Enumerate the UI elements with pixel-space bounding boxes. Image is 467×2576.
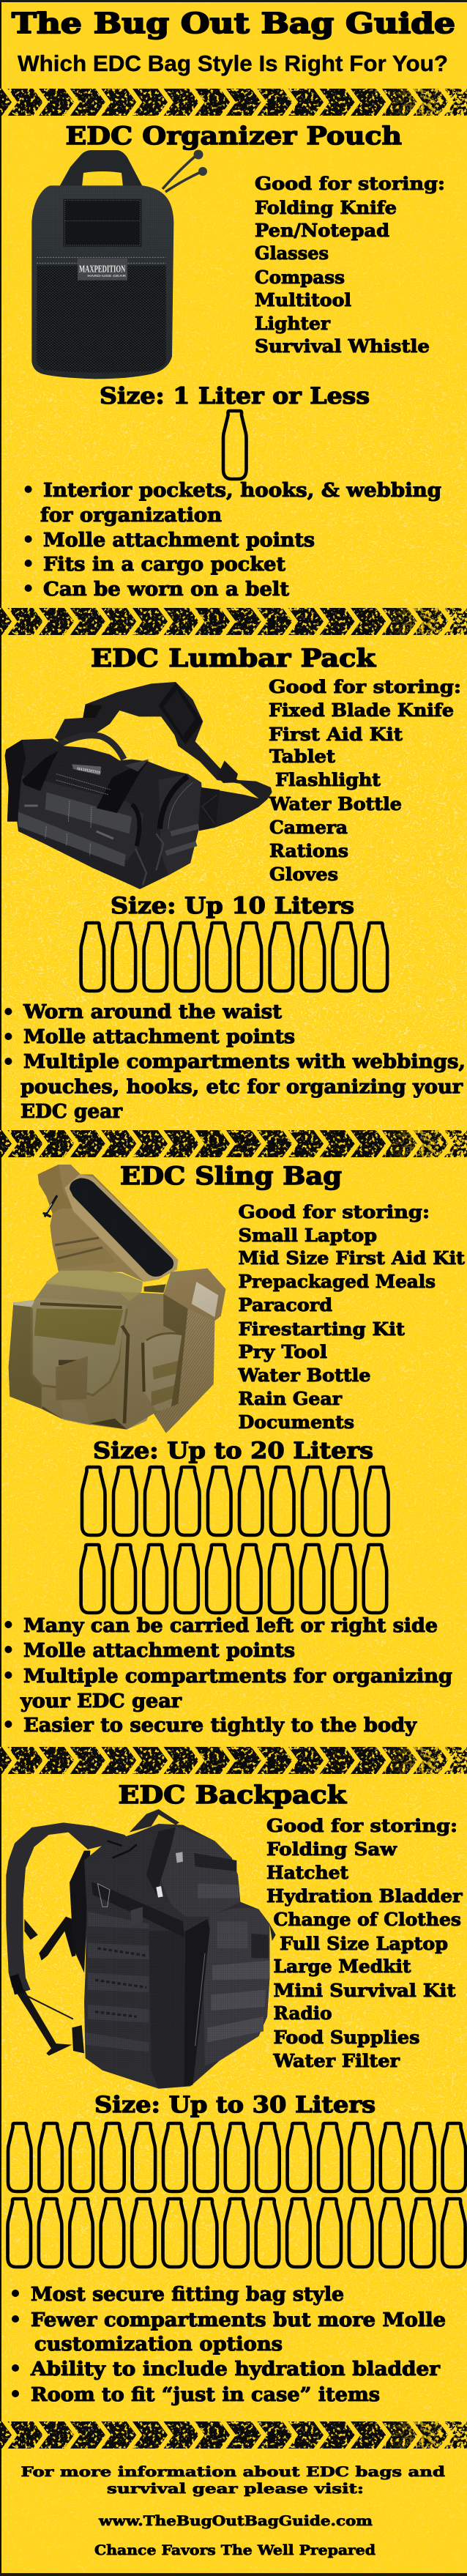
feature bullets: lumbar pack: pouches, hooks, etc for organizing your bbox=[20, 1077, 463, 1099]
storage list: organizer pouch: Pen/Notepad bbox=[255, 220, 389, 241]
storage list: sling bag: Firestarting Kit bbox=[239, 1318, 405, 1340]
storage list: organizer pouch: Folding Knife bbox=[255, 197, 397, 218]
icon rows: twenty bottles bbox=[81, 1467, 388, 1613]
feature bullets: backpack: Fewer compartments but more Molle bbox=[31, 2309, 446, 2331]
storage list: lumbar pack: First Aid Kit bbox=[269, 724, 403, 745]
chevron divider bbox=[0, 2420, 467, 2450]
storage list: backpack: Water Filter bbox=[272, 2050, 400, 2071]
feature bullets: sling bag: your EDC gear bbox=[20, 1690, 182, 1712]
heading: organizer pouch: EDC Organizer Pouch bbox=[66, 122, 402, 151]
storage list: backpack: Folding Saw bbox=[266, 1838, 397, 1860]
size label: 10 liters: Size: Up 10 Liters bbox=[111, 893, 354, 919]
feature bullets: organizer pouch: for organization bbox=[40, 505, 222, 527]
feature bullets: lumbar pack: Multiple compartments with webbings, bbox=[23, 1051, 466, 1073]
photo: organizer pouch bbox=[31, 149, 207, 379]
heading: lumbar pack: EDC Lumbar Pack bbox=[91, 644, 377, 673]
chevron divider bbox=[0, 1129, 467, 1159]
storage list: organizer pouch: Multitool bbox=[255, 289, 351, 311]
feature bullets: organizer pouch: Molle attachment points bbox=[43, 530, 315, 552]
size label: 30 liters: Size: Up to 30 Liters bbox=[94, 2092, 376, 2118]
storage list: lumbar pack: Fixed Blade Knife bbox=[269, 699, 454, 721]
feature bullets: lumbar pack: Worn around the waist bbox=[23, 1001, 282, 1023]
icon rows: thirty bottles bbox=[7, 2123, 466, 2267]
storage list: sling bag: Small Laptop bbox=[239, 1225, 377, 1246]
feature bullets: organizer pouch: Interior pockets, hooks, & webbing bbox=[43, 480, 441, 502]
storage list: organizer pouch: Good for storing: bbox=[255, 173, 445, 194]
subtitle: Which EDC Bag Style Is Right For You? bbox=[18, 51, 448, 76]
feature bullets: sling bag: Easier to secure tightly to the body bbox=[23, 1715, 417, 1737]
storage list: backpack bbox=[266, 1815, 463, 2071]
storage list: backpack: Food Supplies bbox=[274, 2027, 420, 2048]
heading: sling bag: EDC Sling Bag bbox=[120, 1162, 342, 1191]
photo: organizer pouch: MAXPEDITION bbox=[79, 263, 126, 274]
storage list: sling bag bbox=[237, 1201, 465, 1433]
storage list: sling bag: Prepackaged Meals bbox=[239, 1271, 436, 1292]
storage list: lumbar pack bbox=[269, 676, 461, 885]
feature bullets: sling bag bbox=[4, 1615, 452, 1737]
storage list: lumbar pack: Good for storing: bbox=[269, 676, 461, 697]
photo: organizer pouch: HARD-USE GEAR bbox=[87, 274, 127, 278]
feature bullets: backpack: Ability to include hydration bladder bbox=[30, 2358, 440, 2380]
chevron divider bbox=[0, 606, 467, 636]
heading: backpack: EDC Backpack bbox=[119, 1781, 348, 1810]
title: The Bug Out Bag Guide bbox=[12, 7, 455, 40]
feature bullets: organizer pouch: Fits in a cargo pocket bbox=[43, 554, 285, 576]
panel: EDC Lumbar Pack bbox=[4, 644, 466, 1123]
icon: one bottle bbox=[223, 411, 246, 479]
storage list: organizer pouch: Compass bbox=[255, 267, 345, 288]
photo: lumbar pack bbox=[5, 682, 272, 889]
icon row: ten bottles bbox=[81, 923, 387, 991]
feature bullets: backpack: Room to fit “just in case” items bbox=[31, 2384, 380, 2406]
storage list: sling bag: Rain Gear bbox=[239, 1388, 342, 1409]
feature bullets: sling bag: Molle attachment points bbox=[23, 1640, 295, 1662]
footer text bbox=[20, 2464, 445, 2558]
chevron divider bbox=[0, 87, 467, 117]
size label: 1 liter: Size: 1 Liter or Less bbox=[100, 383, 370, 409]
footer text: survival gear please visit: bbox=[107, 2481, 364, 2497]
storage list: organizer pouch bbox=[255, 173, 445, 357]
storage list: sling bag: Mid Size First Aid Kit bbox=[239, 1247, 465, 1269]
feature bullets: backpack bbox=[12, 2284, 446, 2406]
panel: EDC Organizer Pouch bbox=[25, 122, 445, 601]
storage list: lumbar pack: Water Bottle bbox=[269, 793, 402, 814]
storage list: backpack: Radio bbox=[274, 2002, 332, 2024]
chevron divider bbox=[0, 1745, 467, 1775]
storage list: lumbar pack: Camera bbox=[269, 817, 348, 838]
feature bullets: lumbar pack: Molle attachment points bbox=[23, 1026, 295, 1048]
feature bullets: sling bag: Many can be carried left or right side bbox=[23, 1615, 438, 1637]
storage list: backpack: Large Medkit bbox=[274, 1956, 411, 1977]
panel: EDC Sling Bag bbox=[4, 1162, 465, 1737]
photo: backpack bbox=[6, 1809, 276, 2089]
storage list: sling bag: Water Bottle bbox=[237, 1365, 370, 1386]
storage list: sling bag: Good for storing: bbox=[239, 1201, 430, 1222]
storage list: organizer pouch: Survival Whistle bbox=[255, 335, 430, 357]
storage list: backpack: Full Size Laptop bbox=[280, 1933, 448, 1954]
footer text: www.TheBugOutBagGuide.com bbox=[98, 2513, 373, 2529]
storage list: organizer pouch: Glasses bbox=[255, 242, 329, 264]
feature bullets: organizer pouch: Can be worn on a belt bbox=[43, 579, 289, 601]
storage list: organizer pouch: Lighter bbox=[255, 313, 330, 334]
storage list: backpack: Hatchet bbox=[266, 1862, 348, 1883]
storage list: lumbar pack: Flashlight bbox=[275, 769, 381, 790]
panel: EDC Backpack bbox=[6, 1781, 466, 2406]
photo: sling bag bbox=[9, 1165, 225, 1433]
feature bullets: organizer pouch bbox=[25, 480, 441, 601]
feature bullets: backpack: Most secure fitting bag style bbox=[31, 2284, 344, 2306]
storage list: backpack: Hydration Bladder bbox=[266, 1885, 463, 1907]
feature bullets: sling bag: Multiple compartments for organizing bbox=[23, 1666, 452, 1688]
storage list: backpack: Good for storing: bbox=[266, 1815, 457, 1836]
feature bullets: lumbar pack bbox=[4, 1001, 466, 1123]
storage list: backpack: Mini Survival Kit bbox=[274, 1980, 455, 2001]
storage list: lumbar pack: Rations bbox=[269, 840, 348, 861]
storage list: sling bag: Paracord bbox=[239, 1294, 332, 1315]
feature bullets: lumbar pack: EDC gear bbox=[20, 1101, 122, 1123]
footer text: For more information about EDC bags and bbox=[20, 2464, 445, 2480]
photo: lumbar pack: MAXPEDITION bbox=[77, 767, 102, 776]
storage list: lumbar pack: Gloves bbox=[269, 864, 338, 885]
storage list: sling bag: Pry Tool bbox=[239, 1341, 327, 1362]
size label: 20 liters: Size: Up to 20 Liters bbox=[93, 1438, 373, 1464]
storage list: lumbar pack: Tablet bbox=[269, 746, 335, 767]
footer text: Chance Favors The Well Prepared bbox=[94, 2542, 376, 2558]
storage list: backpack: Change of Clothes bbox=[274, 1909, 461, 1930]
feature bullets: backpack: customization options bbox=[34, 2334, 283, 2356]
storage list: sling bag: Documents bbox=[239, 1411, 354, 1433]
